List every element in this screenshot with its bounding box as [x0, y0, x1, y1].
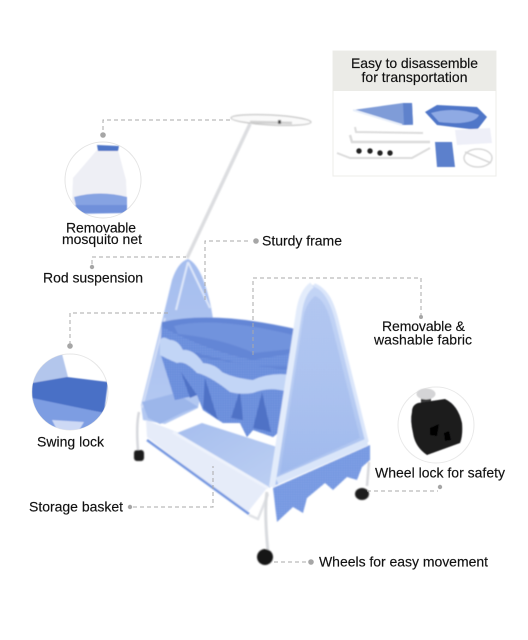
- text: removable mosquito net: mosquito net: [62, 231, 142, 247]
- label: removable and washable fabric: washable fabric: [373, 332, 472, 348]
- label: swing lock: Swing lock: [37, 434, 105, 450]
- connector dot: net: [100, 132, 106, 138]
- panel heading: for transportation: [362, 69, 468, 85]
- panel heading: Easy to disassemble: [351, 55, 478, 71]
- panel: easy to disassemble: [333, 51, 496, 176]
- left legs and wheel: [134, 412, 144, 461]
- wheel right: [355, 488, 369, 500]
- text: removable mosquito net: [62, 220, 142, 247]
- label: removable and washable fabric: Removable &: [382, 318, 466, 334]
- icon: swing lock: [32, 343, 108, 432]
- label: sturdy frame: Sturdy frame: [262, 232, 342, 248]
- label: wheel lock for safety: [375, 464, 505, 489]
- label: wheels for easy movement: Wheels for easy movement: [319, 554, 488, 570]
- storage basket: [146, 420, 277, 519]
- label: removable and washable fabric: [373, 315, 472, 348]
- front skirt: [273, 445, 370, 522]
- label: rod suspension: Rod suspension: [43, 270, 143, 286]
- disassembled parts: [337, 103, 492, 167]
- panel heading: [351, 55, 478, 85]
- frill: [160, 338, 292, 394]
- text: removable mosquito net: Removable: [66, 220, 136, 236]
- label: wheel lock for safety: Wheel lock for safety: [375, 464, 505, 480]
- rod and canopy ring: [187, 113, 311, 258]
- photo: cradle: [134, 113, 370, 565]
- bassinet: [160, 318, 300, 437]
- front frame panel: [272, 285, 368, 487]
- icon: wheel lock: [398, 387, 474, 463]
- front leg and wheel: [257, 492, 273, 565]
- rear skirt: [142, 393, 198, 424]
- icon: mosquito net: [65, 142, 141, 218]
- panel heading background: [333, 51, 496, 91]
- rear frame panel: [141, 259, 215, 424]
- label: storage basket: Storage basket: [29, 498, 123, 514]
- leader lines: [70, 120, 438, 562]
